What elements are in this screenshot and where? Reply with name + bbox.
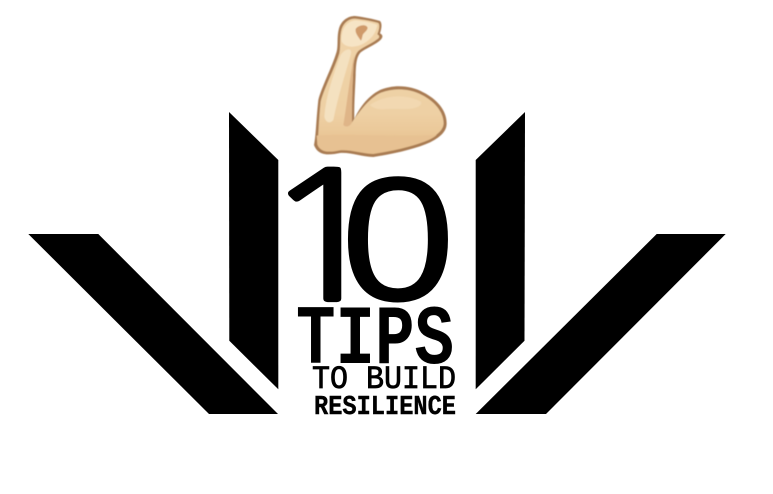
heading: TO BUILD: TO BUILD [312,361,456,398]
heading number: 10: 0 [341,141,455,338]
forearm highlight [324,49,351,122]
icon: flexed biceps arm [314,16,447,157]
heading number: 10: 1 [258,149,393,327]
fist highlight [342,20,377,47]
heading: RESILIENCE: RESILIENCE [314,393,456,423]
thumb crease [356,25,368,40]
left vertical bar [229,112,278,389]
biceps highlight [370,96,421,109]
forearm shadow [343,55,354,126]
left diagonal bar [28,234,278,414]
heading number: 10 [258,141,455,338]
heading: TIPS: TIPS [296,294,454,389]
right diagonal bar [476,234,726,414]
lower arm band [317,135,437,153]
right vertical bar [476,112,525,389]
